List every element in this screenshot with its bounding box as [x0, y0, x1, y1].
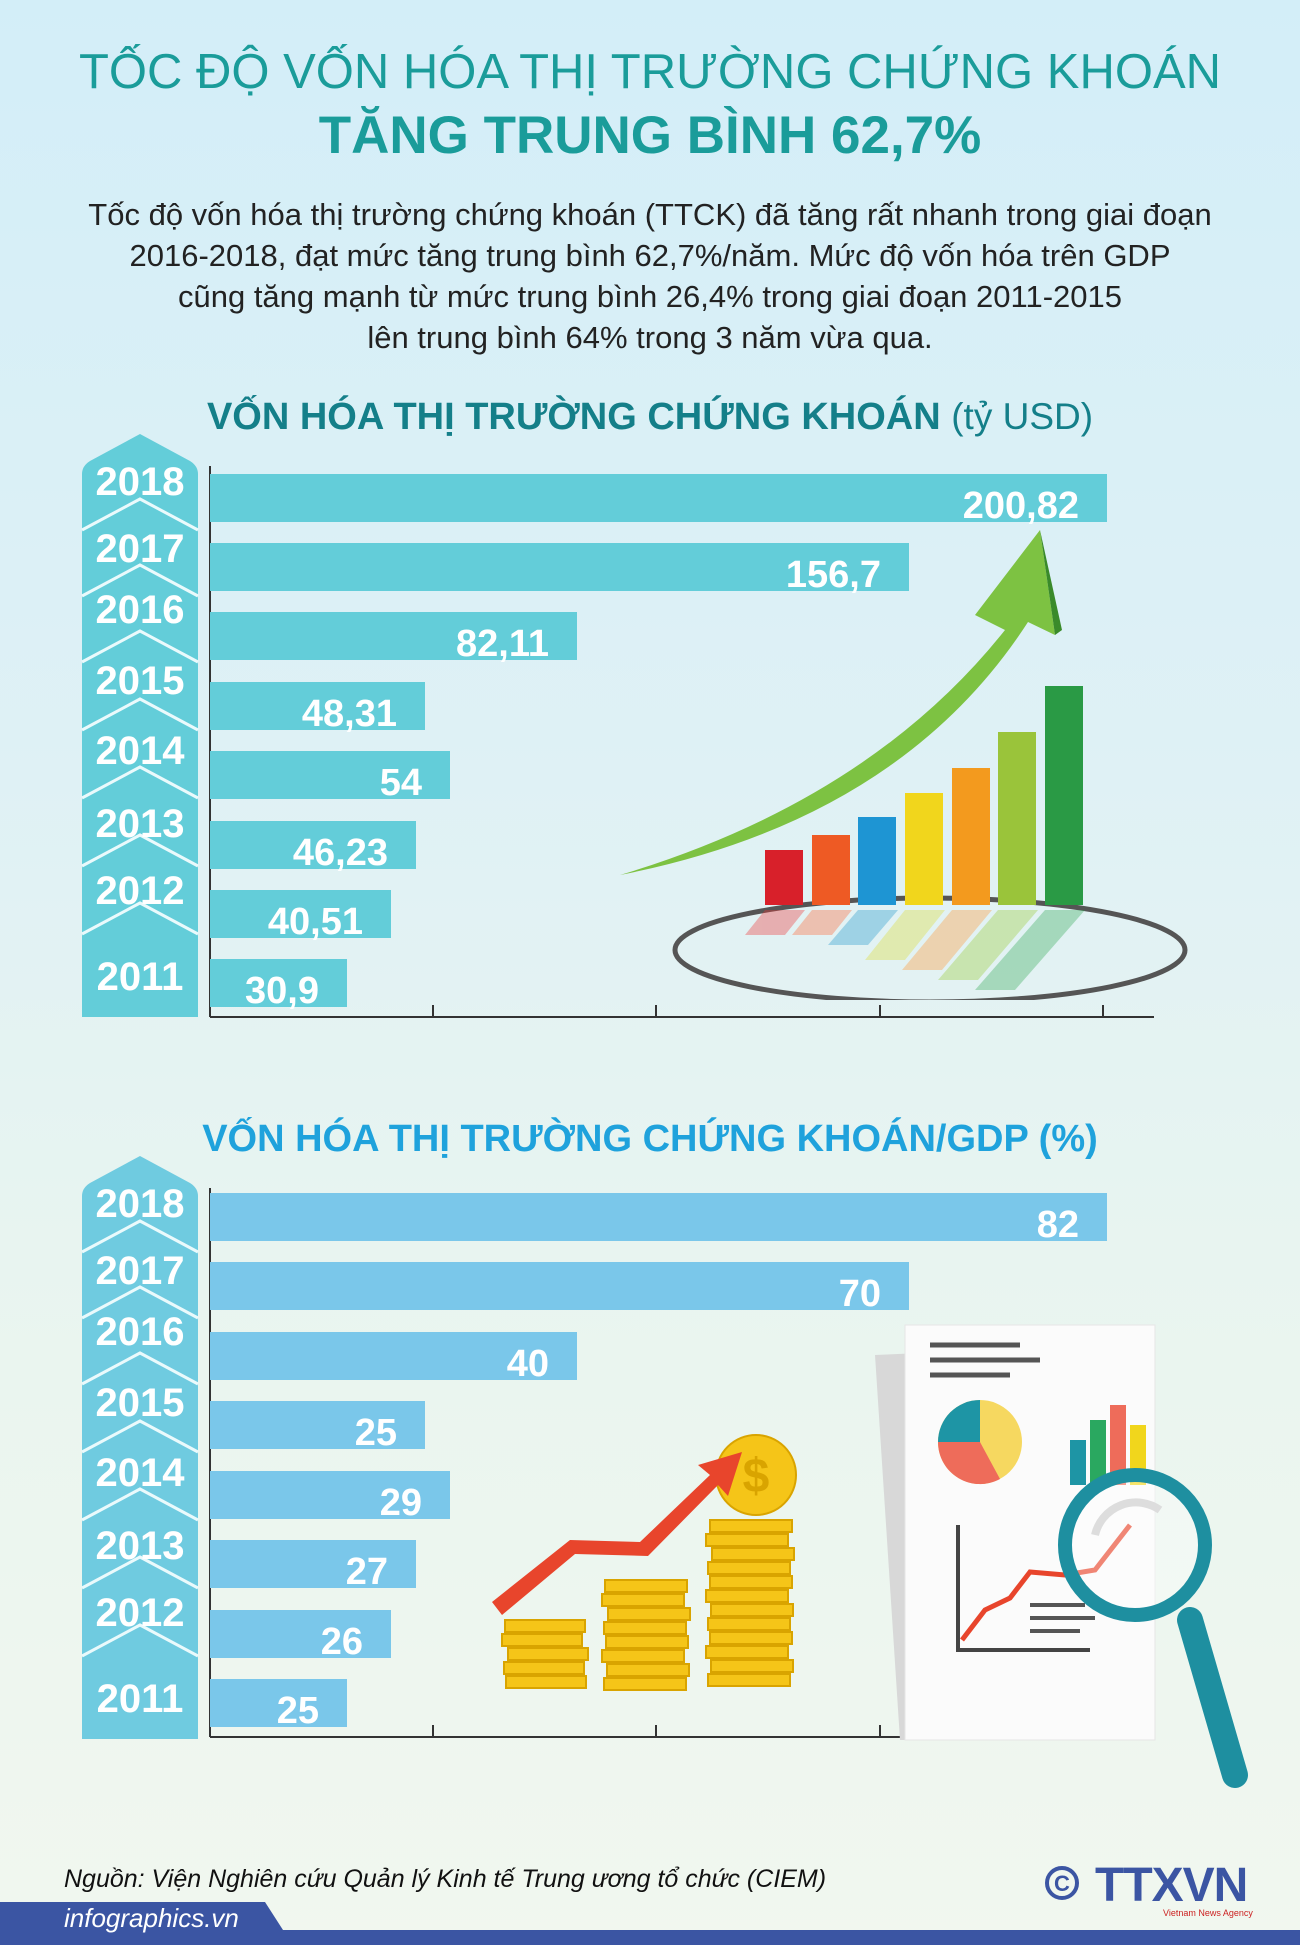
logo TTXVN: Vietnam News Agency	[1163, 1908, 1253, 1918]
intro text: cũng tăng mạnh từ mức trung bình 26,4% trong giai đoạn 2011-2015	[178, 279, 1122, 314]
chart 2: market cap / GDP bars: 25	[277, 1690, 319, 1732]
chart 2: market cap / GDP bars: 2018	[96, 1182, 184, 1226]
title: TỐC ĐỘ VỐN HÓA THỊ TRƯỜNG CHỨNG KHOÁN	[79, 45, 1221, 99]
chart 2: market cap / GDP bars: 27	[346, 1551, 388, 1593]
chart 1: market cap bars: 200,82	[963, 485, 1079, 527]
chart 2: market cap / GDP bars: 82	[1037, 1204, 1079, 1246]
chart 2: market cap / GDP bars: 2016	[96, 1310, 184, 1354]
chart 1: market cap bars: 40,51	[268, 901, 363, 943]
source note: Nguồn: Viện Nghiên cứu Quản lý Kinh tế Trung ương tổ chức (CIEM)	[64, 1865, 826, 1893]
illustration: report with magnifier	[875, 1324, 1248, 1788]
title	[79, 44, 1221, 165]
chart 2: market cap / GDP bars: 2013	[96, 1524, 184, 1568]
chart 2: market cap / GDP bars: 26	[321, 1621, 363, 1663]
chart 1: market cap bars: 2017	[96, 527, 184, 571]
chart 2: market cap / GDP bars: 29	[380, 1482, 422, 1524]
chart 2: market cap / GDP bars: 2014	[96, 1451, 184, 1495]
heading: chart 1: VỐN HÓA THỊ TRƯỜNG CHỨNG KHOÁN (tỷ USD)	[207, 396, 1093, 438]
chart 1: market cap bars: 2014	[96, 729, 184, 773]
chart 1: market cap bars: 2018	[96, 460, 184, 504]
logo TTXVN: C	[1054, 1871, 1070, 1896]
chart 1: market cap bars	[82, 434, 1154, 1018]
intro text: lên trung bình 64% trong 3 năm vừa qua.	[367, 320, 933, 355]
chart 1: market cap bars: 2011	[97, 955, 183, 999]
chart 1: market cap bars: 2016	[96, 588, 184, 632]
illustration: coins and rising arrow	[492, 1434, 797, 1691]
logo TTXVN	[1045, 1859, 1253, 1918]
logo TTXVN: TTXVN	[1095, 1859, 1247, 1912]
chart 2: market cap / GDP bars: 25	[355, 1412, 397, 1454]
footer band	[0, 1902, 1300, 1945]
chart 1: market cap bars: 48,31	[302, 693, 397, 735]
intro text: 2016-2018, đạt mức tăng trung bình 62,7%/năm. Mức độ vốn hóa trên GDP	[130, 238, 1170, 273]
chart 2: market cap / GDP bars: 2011	[97, 1677, 183, 1721]
chart 1: market cap bars: 54	[380, 762, 422, 804]
illustration: growth 3D bar chart	[620, 530, 1188, 1000]
intro text	[88, 197, 1212, 355]
chart 2: market cap / GDP bars: 40	[507, 1343, 549, 1385]
title: TĂNG TRUNG BÌNH 62,7%	[319, 106, 981, 165]
chart 1: market cap bars: 2012	[96, 869, 184, 913]
chart 2: market cap / GDP bars: 2012	[96, 1591, 184, 1635]
year column 1	[82, 434, 1154, 1018]
chart 1: market cap bars: 30,9	[245, 970, 319, 1012]
intro text: Tốc độ vốn hóa thị trường chứng khoán (TTCK) đã tăng rất nhanh trong giai đoạn	[88, 197, 1212, 232]
chart 1: market cap bars: 2015	[96, 659, 184, 703]
chart 2: market cap / GDP bars	[82, 1156, 1107, 1739]
chart 2: market cap / GDP bars: 2015	[96, 1381, 184, 1425]
chart 1: market cap bars: 82,11	[456, 623, 549, 665]
chart 2: market cap / GDP bars: 2017	[96, 1249, 184, 1293]
heading: chart 2: VỐN HÓA THỊ TRƯỜNG CHỨNG KHOÁN/GDP (%)	[202, 1118, 1098, 1160]
illustration: coins and rising arrow: $	[743, 1450, 770, 1503]
chart 1: market cap bars: 156,7	[786, 554, 881, 596]
footer site name: infographics.vn	[64, 1903, 239, 1933]
chart 2: market cap / GDP bars: 70	[839, 1273, 881, 1315]
chart 1: market cap bars: 2013	[96, 802, 184, 846]
chart 1: market cap bars: 46,23	[293, 832, 388, 874]
